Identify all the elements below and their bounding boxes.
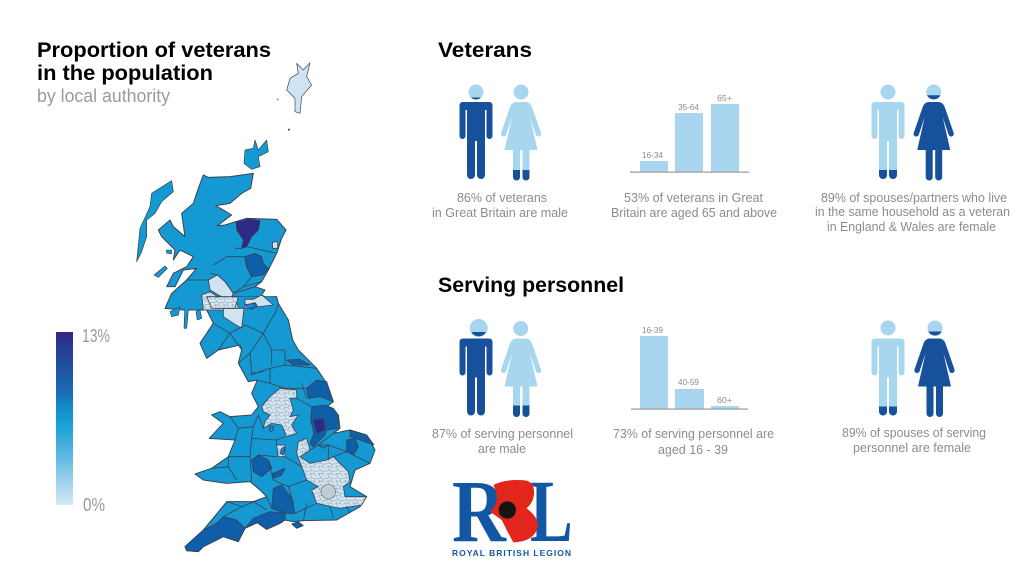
title (37, 39, 271, 106)
map: Scotland base and islands (137, 63, 312, 310)
legend: colour scale (56, 326, 110, 515)
choropleth map of Great Britain (137, 63, 375, 552)
bar chart: serving personnel age: 40-59 (678, 378, 700, 387)
caption: 89% of spouses female (842, 426, 986, 455)
heading: Serving personnel: Serving personnel (438, 274, 624, 297)
caption: 89% of spouses female: 89% of spouses of serving (842, 426, 986, 440)
caption: 53% aged 65+: Britain are aged 65 and above (611, 206, 777, 220)
caption: 89% of spouses/partners female: in the same household as a veteran (815, 205, 1010, 219)
title: Proportion of veterans (37, 39, 271, 62)
logo: Royal British Legion: R (452, 462, 507, 560)
caption: 86% male: in Great Britain are male (432, 206, 568, 220)
legend: colour scale: 13% (82, 326, 110, 346)
bar chart: serving personnel age: 16-39 (642, 326, 664, 335)
caption: 87% male: 87% of serving personnel (432, 427, 573, 441)
logo: Royal British Legion: ROYAL BRITISH LEGION (452, 548, 571, 558)
legend: colour scale: 0% (83, 495, 105, 515)
caption: 89% of spouses/partners female (815, 191, 1010, 234)
icon: serving personnel male share (460, 319, 541, 417)
caption: 86% male (432, 191, 568, 220)
title: in the population (37, 62, 213, 85)
map: English and Welsh local authorities (185, 297, 374, 552)
bar chart: veterans age (630, 94, 749, 173)
caption: 89% of spouses female: personnel are female (853, 441, 971, 455)
icon: veteran spouses female share (872, 84, 954, 180)
map: England and Wales base (170, 297, 375, 552)
caption: 87% male (432, 427, 573, 456)
bar chart: veterans age: 16-34 (642, 151, 664, 160)
bar chart: serving personnel age (631, 326, 748, 410)
bar chart: serving personnel age: 60+ (717, 396, 732, 405)
caption: 53% aged 65+ (611, 191, 777, 220)
heading: Veterans: Veterans (438, 39, 532, 62)
logo: Royal British Legion (452, 462, 573, 561)
caption: 73% aged 16-39: 73% of serving personnel are (613, 427, 774, 441)
icon: serving spouses female share (872, 320, 955, 417)
icon: poppy (490, 480, 538, 542)
title: by local authority (37, 86, 170, 106)
logo: Royal British Legion: L (530, 462, 573, 561)
bar chart: veterans age: 65+ (717, 94, 732, 103)
caption: 73% aged 16-39: aged 16 - 39 (658, 443, 728, 457)
caption: 86% male: 86% of veterans (457, 191, 547, 205)
caption: 53% aged 65+: 53% of veterans in Great (624, 191, 764, 205)
bar chart: veterans age: 35-64 (678, 103, 700, 112)
caption: 87% male: are male (478, 442, 526, 456)
icon: veterans male share (460, 84, 541, 180)
caption: 89% of spouses/partners female: in England & Wales are female (827, 220, 996, 234)
map: Scottish local authorities (187, 218, 278, 310)
caption: 89% of spouses/partners female: 89% of spouses/partners who live (821, 191, 1007, 205)
map: seam cover between Scotland and England (183, 293, 280, 310)
caption: 73% aged 16-39 (613, 427, 774, 457)
